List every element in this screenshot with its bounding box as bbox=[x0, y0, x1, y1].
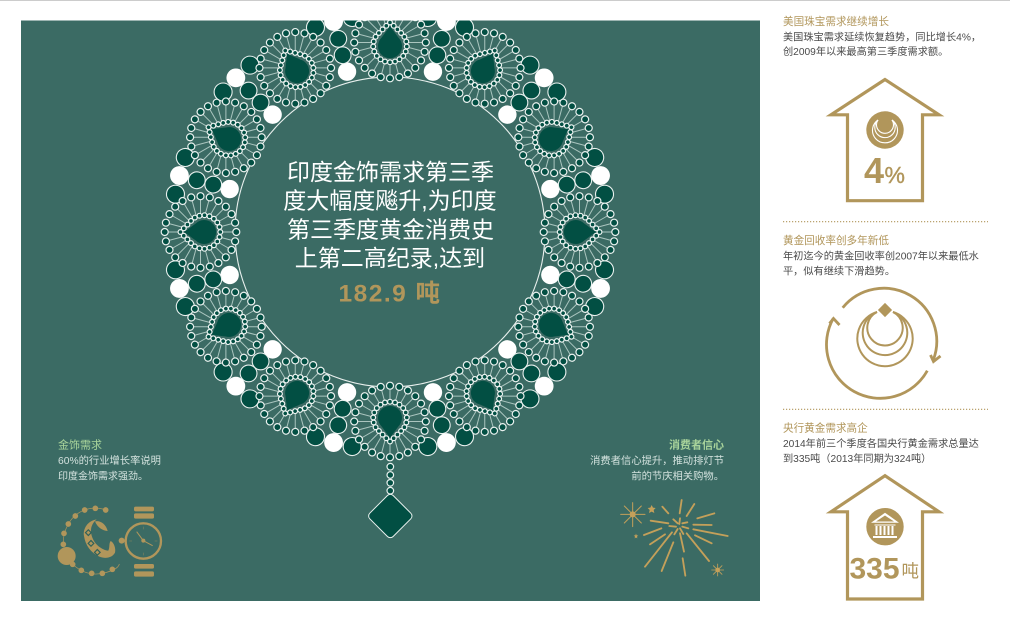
panel: central bank demand bbox=[783, 422, 979, 599]
text: jewellery demand: 60%的行业增长率说明 bbox=[58, 454, 161, 467]
heading: recycling: 黄金回收率创多年新低 bbox=[783, 234, 889, 247]
icon: up arrow 335 tonnes bbox=[831, 476, 939, 599]
heading: US: 美国珠宝需求继续增长 bbox=[783, 15, 889, 28]
icon: up arrow 4% bbox=[831, 80, 939, 201]
text block: central banks bbox=[783, 437, 979, 465]
necklace graphic bbox=[161, 3, 619, 539]
icon: fireworks bbox=[621, 500, 728, 576]
icon: recycling cycle bbox=[826, 288, 940, 398]
divider bbox=[783, 408, 988, 410]
panel: gold recycling bbox=[783, 234, 979, 398]
text block: recycling: 年初迄今的黄金回收率创2007年以来最低水 bbox=[783, 250, 979, 262]
panel: India jewellery demand bbox=[21, 3, 760, 601]
headline: 印度金饰需求第三季 bbox=[287, 159, 494, 185]
text: jewellery demand: 印度金饰需求强劲。 bbox=[58, 470, 148, 482]
headline: 上第二高纪录,达到 bbox=[295, 245, 485, 271]
text block: central banks: 2014年前三个季度各国央行黄金需求总量达 bbox=[783, 437, 979, 450]
text block: recycling: 平，似有继续下滑趋势。 bbox=[783, 264, 895, 278]
text: jewellery demand bbox=[58, 438, 161, 482]
panel: US jewellery demand bbox=[783, 15, 981, 201]
text: consumer confidence: 消费者信心提升，推动排灯节 bbox=[590, 454, 724, 467]
headline: 度大幅度飚升,为印度 bbox=[283, 188, 497, 214]
text: consumer confidence: 消费者信心 bbox=[669, 438, 724, 452]
divider bbox=[783, 221, 988, 223]
text block: US: 美国珠宝需求延续恢复趋势，同比增长4%， bbox=[783, 30, 981, 44]
icon: up arrow 4%: % bbox=[884, 162, 905, 188]
text block: US bbox=[783, 30, 981, 58]
icon: up arrow 4%: 4 bbox=[864, 150, 884, 191]
headline: 182.9 吨 bbox=[338, 280, 442, 308]
icon: up arrow 335 tonnes: 吨 bbox=[902, 561, 919, 581]
headline: 第三季度黄金消费史 bbox=[287, 216, 494, 242]
heading: central banks: 央行黄金需求高企 bbox=[783, 422, 868, 434]
text: jewellery demand: 金饰需求 bbox=[58, 438, 102, 452]
icon: bangle and watch bbox=[58, 505, 161, 577]
icon: up arrow 335 tonnes: 335 bbox=[850, 552, 900, 585]
top rule bbox=[0, 0, 1010, 1]
text: consumer confidence: 前的节庆相关购物。 bbox=[631, 470, 724, 482]
headline bbox=[283, 159, 497, 308]
text block: recycling bbox=[783, 250, 979, 278]
text block: US: 创2009年以来最高第三季度需求额。 bbox=[783, 45, 948, 58]
text block: central banks: 到335吨（2013年同期为324吨） bbox=[783, 452, 931, 465]
text: consumer confidence bbox=[590, 438, 724, 482]
